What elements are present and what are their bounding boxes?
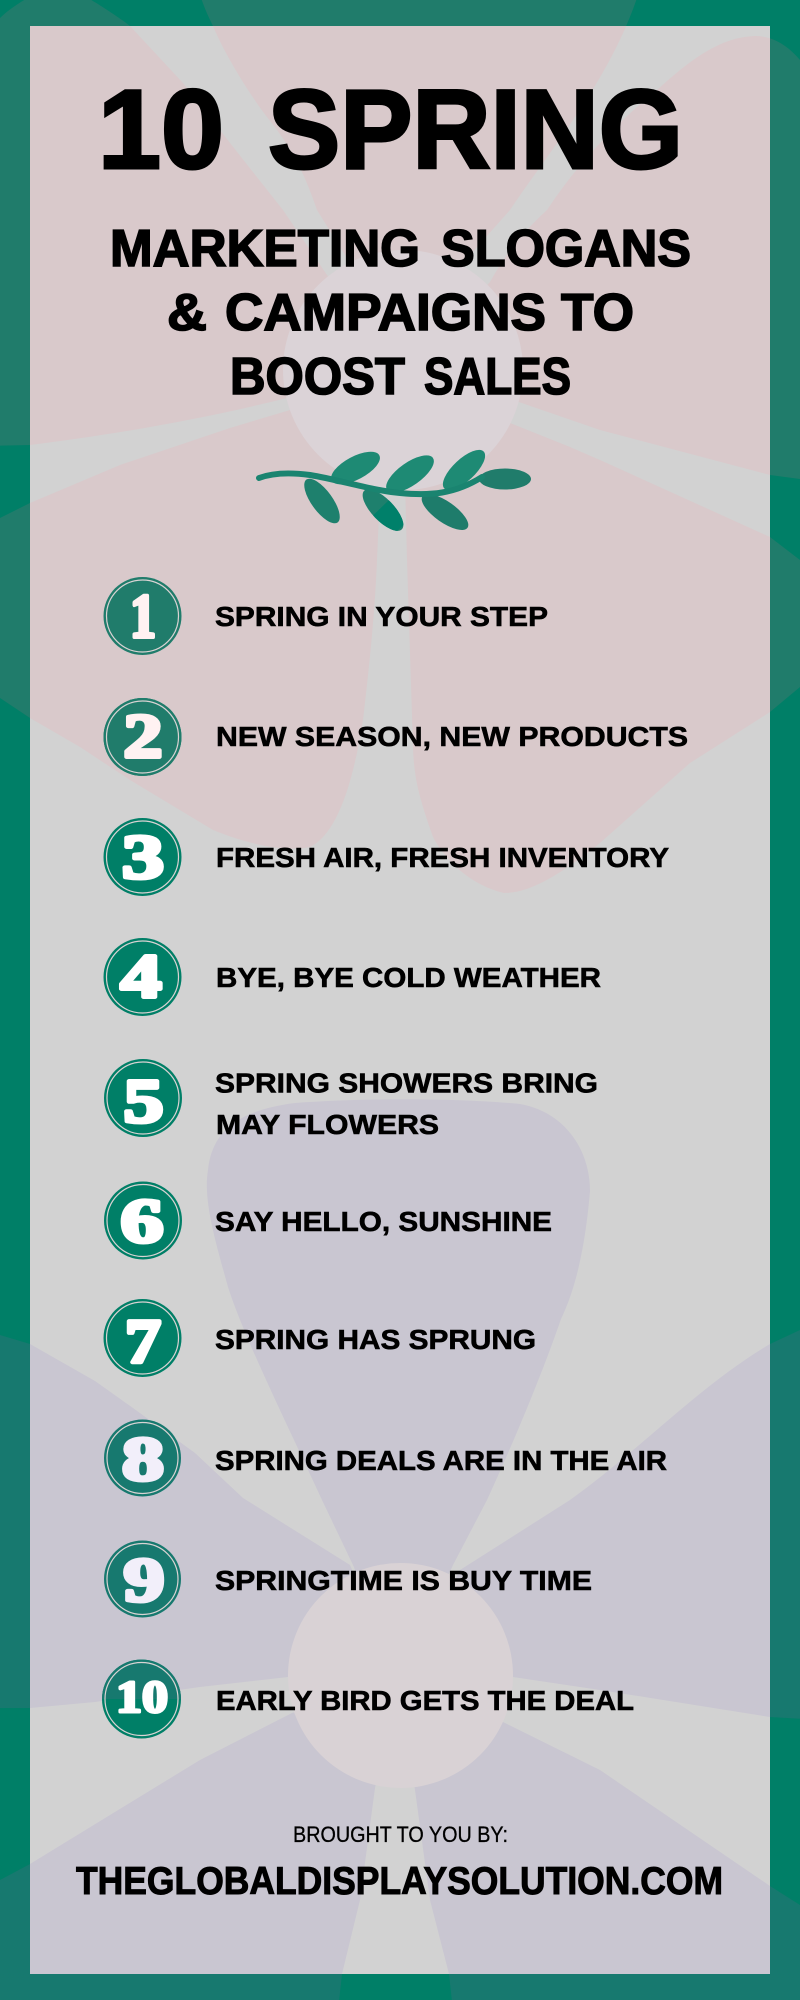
item 8: 8 bbox=[122, 1426, 164, 1494]
item 7 bbox=[104, 1299, 536, 1377]
item 3: 3 bbox=[122, 824, 164, 892]
item 1: 1 bbox=[130, 583, 156, 651]
item 9: SPRINGTIME IS BUY TIME bbox=[215, 1565, 592, 1596]
item 2 bbox=[104, 698, 688, 776]
item 5: MAY FLOWERS bbox=[216, 1109, 439, 1140]
item 7: 7 bbox=[125, 1308, 161, 1376]
item 6: SAY HELLO, SUNSHINE bbox=[215, 1206, 552, 1237]
item 10: 10 bbox=[116, 1672, 168, 1722]
item 1 bbox=[104, 577, 548, 655]
subtitle: TO bbox=[561, 284, 634, 342]
item 1: SPRING IN YOUR STEP bbox=[215, 601, 548, 632]
subtitle: SLOGANS bbox=[441, 220, 691, 278]
item 10: EARLY BIRD GETS THE DEAL bbox=[216, 1685, 634, 1716]
item 8 bbox=[104, 1420, 667, 1496]
item 8: SPRING DEALS ARE IN THE AIR bbox=[215, 1445, 667, 1476]
item 3 bbox=[104, 818, 669, 896]
item 9: 9 bbox=[124, 1547, 164, 1615]
item 2: 2 bbox=[124, 703, 162, 771]
subtitle: & bbox=[167, 284, 207, 342]
item 3: FRESH AIR, FRESH INVENTORY bbox=[216, 842, 669, 873]
item 6: 6 bbox=[120, 1188, 164, 1256]
item 10 bbox=[100, 1655, 634, 1738]
item 4: BYE, BYE COLD WEATHER bbox=[216, 962, 601, 993]
subtitle: MARKETING bbox=[110, 220, 420, 278]
title: SPRING bbox=[268, 67, 683, 192]
item 4 bbox=[104, 938, 601, 1016]
item 7: SPRING HAS SPRUNG bbox=[215, 1324, 536, 1355]
subtitle: BOOST bbox=[230, 348, 405, 406]
footer: attribution: BROUGHT TO YOU BY: bbox=[293, 1822, 508, 1847]
icon: leafy branch bbox=[256, 450, 531, 531]
title: 10 bbox=[98, 67, 224, 192]
item 4: 4 bbox=[120, 943, 162, 1011]
item 5 bbox=[104, 1059, 598, 1140]
item 5: SPRING SHOWERS BRING bbox=[215, 1068, 598, 1098]
subtitle: CAMPAIGNS bbox=[225, 284, 546, 342]
item 2: NEW SEASON, NEW PRODUCTS bbox=[216, 721, 688, 752]
subtitle: SALES bbox=[424, 348, 571, 406]
item 5: 5 bbox=[124, 1068, 164, 1136]
subtitle bbox=[110, 220, 691, 406]
item 6 bbox=[104, 1182, 552, 1260]
footer: website: THEGLOBALDISPLAYSOLUTION.COM bbox=[76, 1860, 723, 1903]
item 9 bbox=[104, 1540, 592, 1618]
title bbox=[98, 67, 683, 192]
